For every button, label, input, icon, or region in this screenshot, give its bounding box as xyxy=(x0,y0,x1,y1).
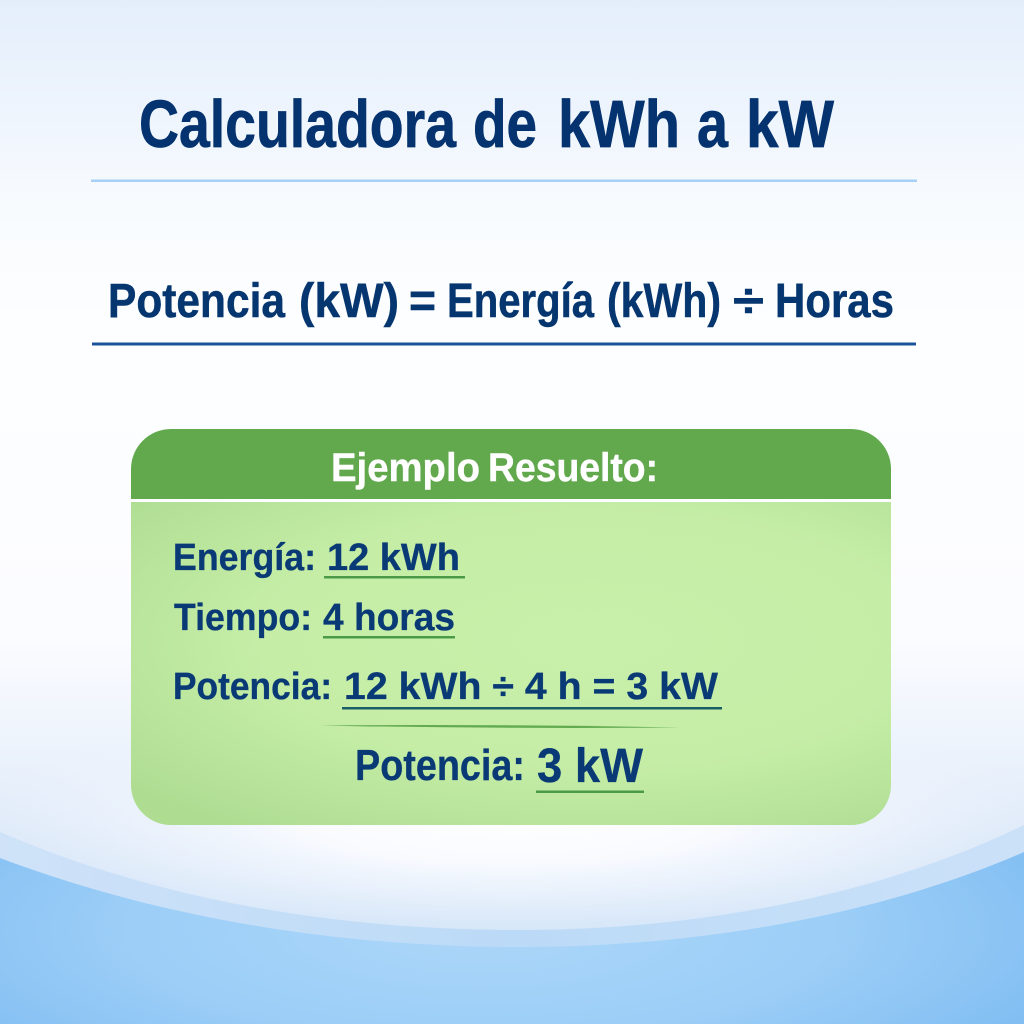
energy row: 12 kWh xyxy=(327,537,460,579)
title: de xyxy=(473,87,537,162)
formula: Energía xyxy=(447,275,594,328)
background wave: blue xyxy=(0,852,1024,1024)
panel heading: Ejemplo xyxy=(331,446,480,490)
panel heading: Resuelto: xyxy=(488,446,658,490)
background wave: light band xyxy=(0,825,1024,1024)
result row: 3 kW xyxy=(537,740,644,793)
power calculation row: 12 kWh ÷ 4 h = 3 kW xyxy=(344,666,718,708)
time row xyxy=(174,597,455,639)
panel heading xyxy=(331,446,658,490)
title: kW xyxy=(746,87,835,162)
formula: (kW) xyxy=(299,275,399,328)
result row: Potencia: xyxy=(355,741,525,790)
title: kWh xyxy=(558,87,680,162)
energy row xyxy=(173,537,465,579)
time row: 4 horas xyxy=(323,597,455,639)
formula: (kWh) xyxy=(607,275,721,328)
power calculation row: Potencia: xyxy=(173,666,332,708)
power calculation row xyxy=(173,666,722,710)
panel: worked example xyxy=(131,429,891,825)
result row xyxy=(355,740,644,793)
title: a xyxy=(697,87,729,162)
formula: ÷ xyxy=(733,275,764,328)
formula: Potencia xyxy=(108,275,285,328)
title xyxy=(139,87,835,162)
time row: Tiempo: xyxy=(174,597,312,639)
panel header xyxy=(131,429,891,499)
panel body xyxy=(131,502,891,825)
formula: Horas xyxy=(775,275,894,328)
title: Calculadora xyxy=(139,87,457,162)
formula xyxy=(92,275,916,346)
formula: = xyxy=(409,275,436,328)
energy row: Energía: xyxy=(173,537,316,579)
